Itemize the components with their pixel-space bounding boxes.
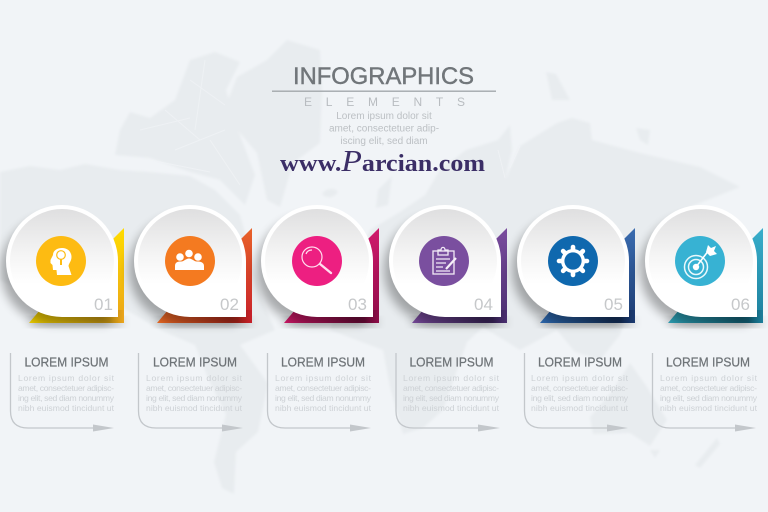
body 02 (146, 373, 243, 413)
heading 01: LOREM IPSUM (24, 354, 108, 370)
heading 02: LOREM IPSUM (153, 354, 237, 370)
flap 03 (284, 228, 379, 326)
body 02: ing elit, sed diam nonummy (146, 393, 243, 403)
body 03 (275, 373, 372, 413)
arrow 06 (652, 353, 756, 432)
title: INFOGRAPHICS (293, 63, 474, 90)
teardrop (134, 205, 246, 317)
icon: people (165, 236, 215, 286)
body 04: ing elit, sed diam nonummy (403, 393, 500, 403)
arrow 01 (10, 353, 114, 432)
body 05: nibh euismod tincidunt ut (531, 403, 629, 413)
intro text: Lorem ipsum dolor sit (336, 111, 432, 122)
text block 03 (268, 353, 372, 432)
body 01: ing elit, sed diam nonummy (18, 393, 115, 403)
card 01 (1, 205, 124, 326)
body 03: Lorem ipsum dolor sit (275, 373, 372, 383)
body 05: Lorem ipsum dolor sit (531, 373, 629, 383)
body 02: amet, consectetuer adipisc- (146, 383, 242, 393)
heading 06: LOREM IPSUM (666, 354, 750, 370)
body 01: amet, consectetuer adipisc- (18, 383, 114, 393)
heading 04: LOREM IPSUM (410, 354, 494, 370)
icon: target (675, 236, 725, 286)
title rule (272, 90, 496, 92)
heading 03: LOREM IPSUM (281, 354, 365, 370)
number 03: 03 (348, 295, 367, 314)
body 06: amet, consectetuer adipisc- (660, 383, 757, 393)
icon: head with lightbulb (36, 236, 86, 286)
text block 02 (138, 353, 243, 432)
card 02 (129, 205, 252, 326)
card 03 (256, 205, 379, 326)
card 06 (640, 205, 763, 326)
body 04: Lorem ipsum dolor sit (403, 373, 500, 383)
flap 02 (157, 228, 252, 326)
body 06: Lorem ipsum dolor sit (660, 373, 758, 383)
icon: gear (548, 236, 598, 286)
icon: magnifier (292, 236, 342, 286)
title block (272, 63, 496, 178)
body 05 (531, 373, 629, 413)
body 06 (660, 373, 758, 413)
card shadow (129, 216, 237, 324)
intro text: iscing elit, sed diam (340, 136, 428, 147)
teardrop (389, 205, 501, 317)
body 02: nibh euismod tincidunt ut (146, 403, 243, 413)
number 06: 06 (731, 295, 750, 314)
heading 05: LOREM IPSUM (538, 354, 622, 370)
intro text (329, 111, 439, 147)
card shadow (512, 216, 620, 324)
subtitle: ELEMENTS (304, 95, 465, 109)
arrow 03 (268, 353, 371, 432)
text block 06 (652, 353, 758, 432)
teardrop (6, 205, 118, 317)
body 04: amet, consectetuer adipisc- (403, 383, 499, 393)
teardrop (517, 205, 629, 317)
flap 05 (540, 228, 635, 326)
flap 06 (668, 228, 763, 326)
body 06: ing elit, sed diam nonummy (660, 393, 758, 403)
body 03: nibh euismod tincidunt ut (275, 403, 372, 413)
body 01: nibh euismod tincidunt ut (18, 403, 115, 413)
number 01: 01 (94, 295, 113, 314)
number 05: 05 (604, 295, 623, 314)
body 05: ing elit, sed diam nonummy (531, 393, 629, 403)
card shadow (1, 216, 109, 324)
number 04: 04 (474, 295, 493, 314)
flap 01 (29, 228, 124, 326)
body 03: ing elit, sed diam nonummy (275, 393, 372, 403)
body 04: nibh euismod tincidunt ut (403, 403, 500, 413)
text block 05 (524, 353, 629, 432)
body 06: nibh euismod tincidunt ut (660, 403, 758, 413)
arrow 05 (524, 353, 628, 432)
arrow 02 (138, 353, 243, 432)
teardrop (261, 205, 373, 317)
icon: clipboard (419, 236, 469, 286)
card shadow (256, 216, 364, 324)
card 05 (512, 205, 635, 326)
flap 04 (412, 228, 507, 326)
teardrop (645, 205, 757, 317)
arrow 04 (396, 353, 500, 432)
website watermark: www.Parcian.com (280, 143, 485, 178)
number 02: 02 (220, 295, 239, 314)
card shadow (640, 216, 748, 324)
body 01: Lorem ipsum dolor sit (18, 373, 115, 383)
text block 04 (396, 353, 500, 432)
card 04 (384, 205, 507, 326)
card shadow (384, 216, 492, 324)
body 02: Lorem ipsum dolor sit (146, 373, 243, 383)
text block 01 (10, 353, 115, 432)
body 03: amet, consectetuer adipisc- (275, 383, 371, 393)
intro text: amet, consectetuer adip- (329, 124, 439, 134)
body 05: amet, consectetuer adipisc- (531, 383, 628, 393)
body 01 (18, 373, 115, 413)
body 04 (403, 373, 500, 413)
